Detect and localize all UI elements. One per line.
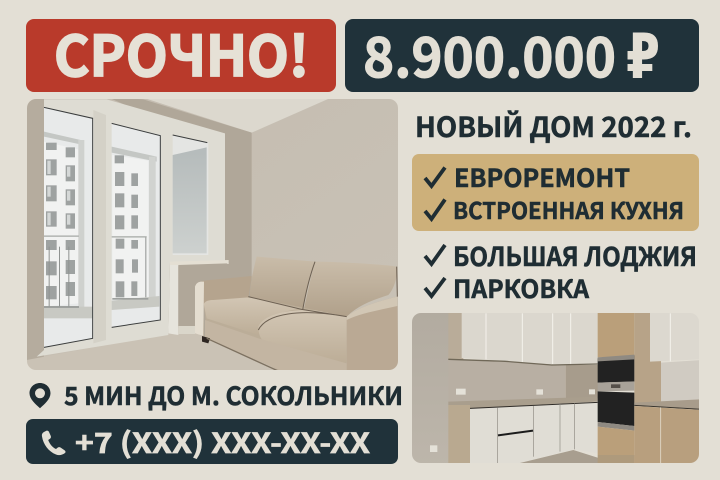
side glass pane xyxy=(173,135,208,255)
wood tall cabinet xyxy=(598,310,634,357)
icon: check xyxy=(425,168,445,186)
counter right xyxy=(634,399,702,409)
location line: 5 МИН ДО М. СОКОЛЬНИКИ xyxy=(64,377,403,413)
phone banner xyxy=(26,419,398,464)
heading: new building: НОВЫЙ ДОМ 2022 г. xyxy=(415,105,692,145)
upper right cabinets xyxy=(650,313,661,362)
feature: built-in kitchen: ВСТРОЕННАЯ КУХНЯ xyxy=(453,192,684,226)
kitchen left wall xyxy=(412,313,448,463)
left glass pane xyxy=(44,107,93,347)
sofa xyxy=(195,257,398,373)
floor xyxy=(520,450,598,463)
icon: check xyxy=(425,200,445,219)
lower white cabinets xyxy=(470,403,598,465)
side wall xyxy=(107,97,252,337)
panel: highlighted features xyxy=(412,154,699,231)
counter left xyxy=(448,397,598,408)
lower left wood xyxy=(448,405,470,467)
feature: euro renovation: ЕВРОРЕМОНТ xyxy=(454,159,630,195)
floor xyxy=(27,334,203,364)
room walls xyxy=(44,99,398,357)
sockets xyxy=(430,389,595,452)
backsplash xyxy=(448,359,566,403)
icon: map pin xyxy=(30,383,50,408)
upper white cabinets xyxy=(462,313,570,364)
feature: parking: ПАРКОВКА xyxy=(453,270,590,306)
phone banner: +7 (XXX) XXX-XX-XX xyxy=(75,422,370,462)
price banner: 8.900.000 xyxy=(363,13,616,93)
building behind left pane xyxy=(44,132,92,318)
left wall strip xyxy=(27,99,44,360)
lower right wood xyxy=(634,406,702,467)
oven tower xyxy=(598,355,634,465)
middle glass pane xyxy=(112,123,161,327)
window frame xyxy=(37,99,225,357)
urgent banner: СРОЧНО! xyxy=(54,12,309,93)
window edge lines xyxy=(44,107,207,347)
icon: phone handset xyxy=(42,431,66,455)
kitchen upper backing xyxy=(448,310,463,362)
radiator column xyxy=(168,265,178,335)
photo: kitchen xyxy=(408,310,702,467)
feature: large loggia: БОЛЬШАЯ ЛОДЖИЯ xyxy=(453,237,697,274)
building behind middle pane xyxy=(112,147,159,310)
photo: living room with sofa xyxy=(23,97,403,373)
ceiling xyxy=(148,99,328,132)
price banner: ₽ xyxy=(626,20,660,93)
window sill xyxy=(170,260,229,267)
